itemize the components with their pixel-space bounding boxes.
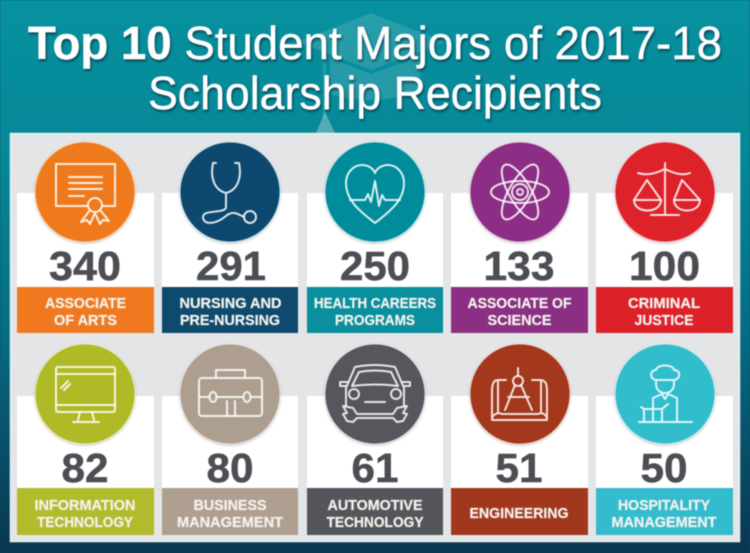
card: associate of science [451, 142, 588, 333]
label [314, 296, 436, 329]
card: automotive technology [307, 344, 443, 535]
label: HOSPITALITY [618, 498, 710, 514]
icon: graduation cap watermark [297, 13, 445, 133]
label [326, 498, 424, 531]
label: ASSOCIATE [45, 296, 126, 312]
card: criminal justice [596, 142, 733, 333]
card: engineering [451, 344, 588, 535]
icon: scales [615, 142, 715, 242]
icon: compass and blueprint [470, 344, 570, 444]
label [612, 498, 717, 531]
label [628, 296, 700, 329]
value: 100 [629, 243, 700, 289]
label [34, 498, 136, 531]
card: business management [162, 344, 298, 535]
label: HEALTH CAREERS [314, 296, 436, 312]
icon: car with wrench [325, 344, 425, 444]
label: ENGINEERING [470, 506, 568, 522]
card: health careers [307, 142, 443, 333]
value: 250 [340, 243, 410, 289]
card: information technology [17, 344, 154, 535]
panel: majors [10, 134, 740, 542]
label [180, 296, 282, 329]
label: SCIENCE [488, 313, 552, 329]
title [28, 17, 722, 119]
icon: stethoscope [180, 142, 280, 242]
label: TECHNOLOGY [37, 515, 133, 531]
label: BUSINESS [194, 498, 267, 514]
title: Scholarship Recipients [148, 67, 602, 119]
value: 291 [196, 243, 266, 289]
title: Top 10 Student Majors of 2017-18 [28, 17, 722, 69]
label: OF ARTS [54, 313, 117, 329]
icon: heart with pulse [325, 142, 425, 242]
icon: atom [470, 142, 570, 242]
value: 133 [484, 243, 554, 289]
icon: briefcase [180, 344, 280, 444]
card: nursing [162, 142, 298, 333]
label: PROGRAMS [335, 313, 415, 329]
icon: diploma [35, 142, 135, 242]
label: AUTOMOTIVE [328, 498, 423, 514]
label: INFORMATION [34, 498, 136, 514]
label: NURSING AND [180, 296, 282, 312]
label: PRE-NURSING [180, 313, 280, 329]
label [177, 498, 283, 531]
icon: monitor [35, 344, 135, 444]
label [45, 296, 126, 329]
label: MANAGEMENT [177, 515, 283, 531]
icon: chef [615, 344, 715, 444]
label: JUSTICE [634, 313, 694, 329]
label: TECHNOLOGY [326, 515, 424, 531]
value: 61 [352, 445, 398, 491]
card: associate of arts [17, 142, 154, 333]
label [468, 296, 572, 329]
value: 51 [496, 445, 542, 491]
value: 50 [640, 445, 688, 491]
label: ASSOCIATE OF [468, 296, 572, 312]
value: 82 [62, 445, 108, 491]
value: 340 [49, 243, 121, 289]
label: MANAGEMENT [612, 515, 717, 531]
card: hospitality management [596, 344, 733, 535]
label: CRIMINAL [628, 296, 700, 312]
value: 80 [206, 445, 254, 491]
